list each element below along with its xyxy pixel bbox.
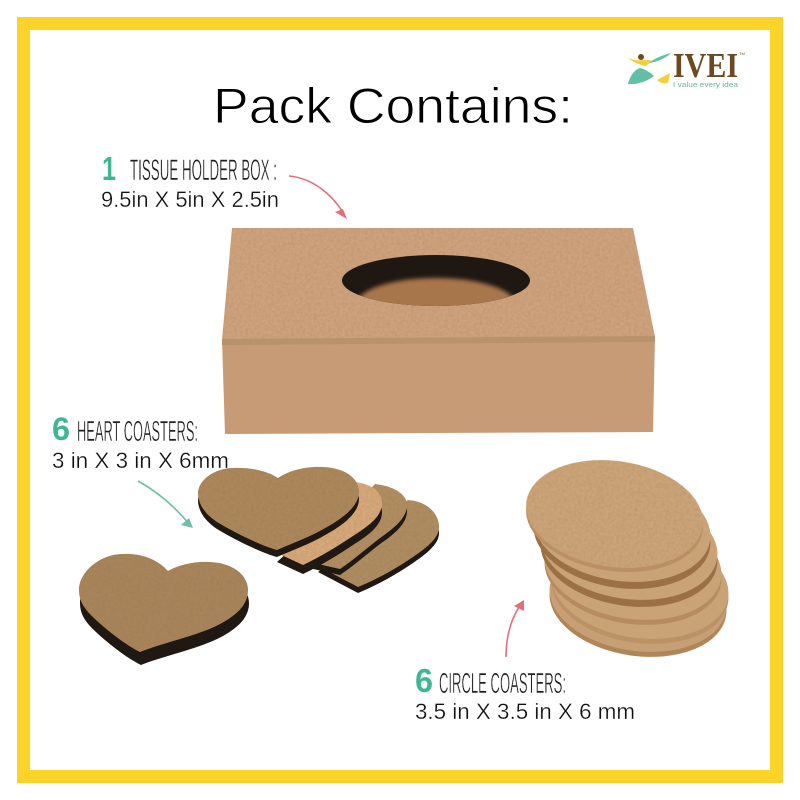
circle 4: [537, 501, 729, 636]
heart 2: [277, 482, 382, 574]
box oval opening: [342, 255, 530, 306]
arrow: to box: [289, 176, 347, 219]
dimensions: 3 in X 3 in X 6mm: [52, 448, 229, 473]
logo tagline: I value every idea: [673, 80, 739, 89]
text: TISSUE HOLDER BOX :: [130, 154, 277, 187]
label: circle coasters: [415, 662, 635, 724]
dimensions: 9.5in X 5in X 2.5in: [101, 187, 279, 212]
box front face: [222, 337, 655, 434]
label: circle coasters: CIRCLE COASTERS:: [439, 668, 566, 700]
dimensions: 3.5 in X 3.5 in X 6 mm: [415, 699, 635, 724]
tissue box: [222, 228, 655, 434]
logo icon: [628, 53, 671, 84]
arrow: to hearts: [138, 481, 193, 528]
heart 4: [318, 500, 439, 593]
label: heart coasters: HEART COASTERS:: [77, 416, 198, 448]
box edge band: [222, 336, 655, 345]
circle 3: [533, 481, 725, 618]
quantity: 6: [52, 411, 70, 447]
heart 3: [300, 484, 407, 575]
heart coasters stack: [198, 467, 439, 593]
circle 1: [519, 449, 710, 583]
logo: [628, 46, 745, 89]
logo wordmark: IVEI: [673, 46, 738, 85]
label: tissue holder box: [101, 150, 279, 212]
circle 6: [542, 533, 734, 668]
label: heart coasters: [52, 411, 229, 473]
single heart coaster: [79, 554, 249, 665]
box top face: [222, 228, 655, 340]
circle 2: [526, 463, 718, 600]
heart side: [80, 567, 249, 665]
title: Pack Contains:: [213, 78, 573, 134]
trademark: TM: [739, 51, 745, 56]
quantity: 6: [415, 662, 433, 699]
circle coasters stack: [519, 449, 736, 668]
heart 1: [198, 467, 359, 557]
circle 5: [544, 520, 736, 655]
arrow: to circles: [506, 600, 524, 657]
heart face: [79, 554, 248, 652]
quantity: 1: [102, 150, 116, 187]
